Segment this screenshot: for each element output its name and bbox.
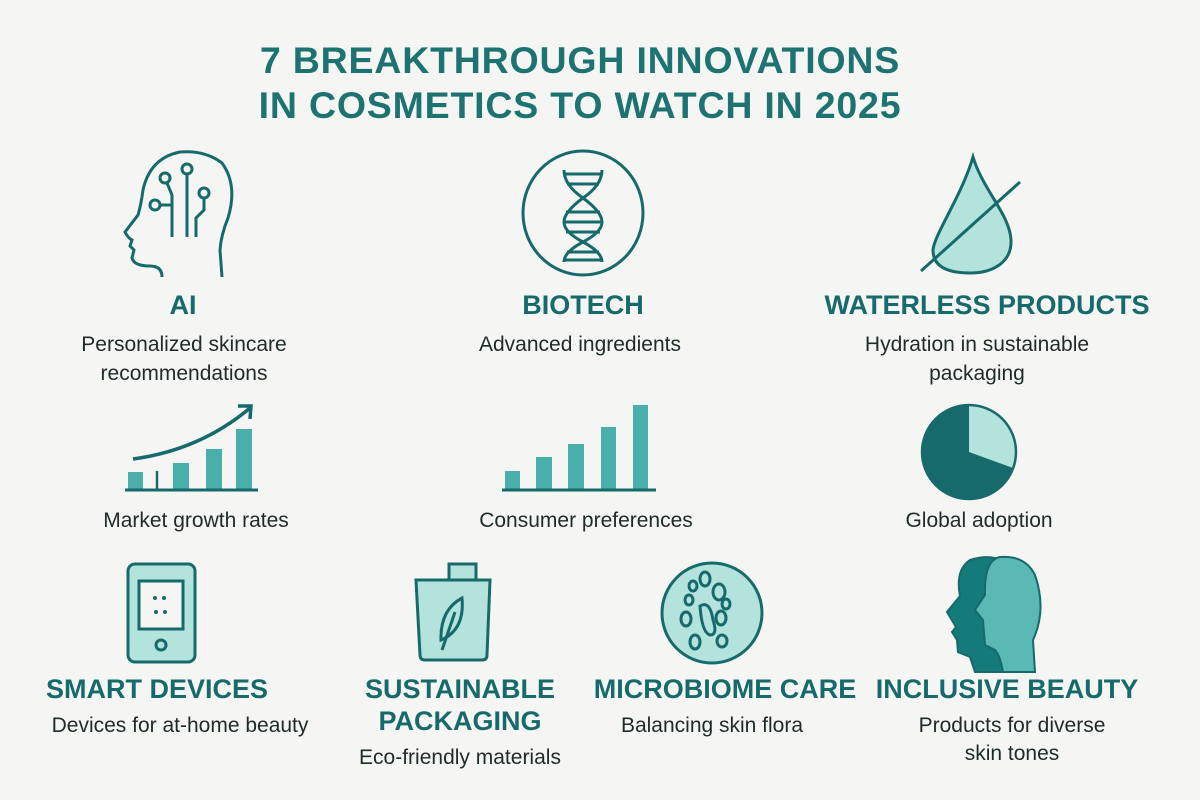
label: sustainable packaging: PACKAGING	[378, 706, 542, 736]
title: IN COSMETICS TO WATCH IN 2025	[259, 84, 901, 126]
chart: market growth: Market growth rates	[103, 509, 289, 532]
icon: inclusive beauty heads	[947, 557, 1041, 672]
label: sustainable packaging	[359, 674, 561, 769]
icon: microbiome	[662, 563, 762, 663]
title: 7 BREAKTHROUGH INNOVATIONS	[260, 39, 900, 81]
label: AI: AI	[170, 290, 196, 320]
label: AI: Personalized skincare	[81, 333, 287, 356]
label: AI: recommendations	[101, 362, 267, 385]
icon: DNA	[523, 151, 643, 275]
title	[259, 39, 901, 126]
label: biotech: BIOTECH	[522, 290, 644, 320]
label: AI	[81, 290, 287, 385]
label: waterless	[824, 290, 1150, 385]
label: smart devices	[46, 674, 309, 737]
label: smart devices: Devices for at-home beauty	[52, 714, 309, 737]
label: microbiome: Balancing skin flora	[621, 714, 803, 737]
label: inclusive beauty: INCLUSIVE BEAUTY	[876, 674, 1138, 704]
label: waterless: Hydration in sustainable	[865, 333, 1089, 356]
chart: global adoption pie: Global adoption	[905, 509, 1053, 532]
label: biotech: Advanced ingredients	[479, 333, 681, 356]
label: inclusive beauty	[876, 674, 1138, 765]
icon: smart device	[128, 564, 195, 662]
label: waterless: packaging	[929, 362, 1025, 385]
label: sustainable packaging: SUSTAINABLE	[365, 674, 555, 704]
icon: sustainable packaging	[416, 564, 490, 660]
label: waterless: WATERLESS PRODUCTS	[824, 290, 1150, 320]
chart: consumer preferences	[479, 405, 693, 532]
chart: consumer preferences: Consumer preferences	[479, 509, 693, 532]
label: biotech	[479, 290, 681, 356]
label: sustainable packaging: Eco-friendly materials	[359, 746, 561, 769]
label: inclusive beauty: skin tones	[965, 742, 1059, 765]
label: smart devices: SMART DEVICES	[46, 674, 268, 704]
chart: global adoption pie	[905, 405, 1053, 532]
label: microbiome: MICROBIOME CARE	[594, 674, 856, 704]
icon: AI head	[125, 152, 232, 277]
chart: market growth	[103, 406, 289, 532]
label: microbiome	[594, 674, 856, 737]
label: inclusive beauty: Products for diverse	[919, 714, 1105, 737]
icon: waterless drop	[921, 157, 1020, 273]
